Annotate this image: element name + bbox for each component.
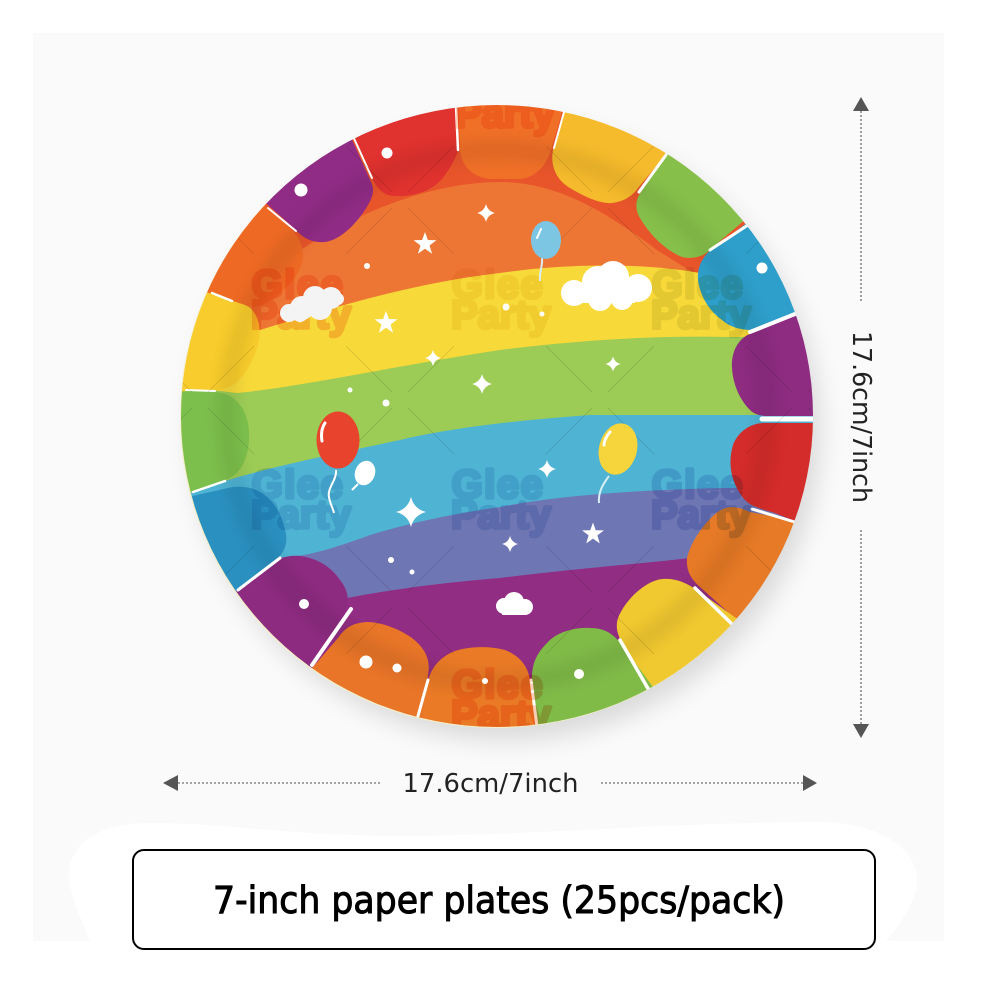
rim tab: green left [181,391,249,492]
watermark lower middle: Party [451,493,552,537]
plate shadow [192,122,820,740]
watermark lower right: Party [651,493,752,537]
cloud bottom [496,592,533,615]
cloud upper left [280,286,344,322]
band: yellow [215,266,750,393]
band: blue [190,415,813,558]
watermark lower left: Party [251,493,352,537]
watermark upper middle: Party [451,293,552,337]
balloon white small [351,458,379,490]
rim tab: purple lower left [236,556,348,620]
rim tab: blue [698,224,795,330]
horizontal dimension arrow [163,769,817,799]
balloon red [316,412,360,513]
rim tab: blue left [192,486,286,592]
rim tab: orange lower right [686,507,794,618]
watermark upper right: Party [651,293,752,337]
watermark upper left: Glee [252,263,344,307]
watermark lower left [251,463,352,537]
cloud upper middle [561,261,652,311]
rim tab: green [636,154,744,258]
rim tab: red top [355,108,458,196]
watermark lower right: Glee [652,463,744,507]
band: green [190,336,759,493]
rim tab: red right [730,423,813,520]
rim tab: yellow lower right [616,578,736,686]
watermark top: Party [455,92,556,136]
watermark bottom: Party [451,693,552,737]
watermark upper middle: Glee [452,263,544,307]
white bottom blob [69,822,917,941]
band: purple [311,558,730,679]
horizontal dimension label: 17.6cm/7inch [402,769,578,799]
watermark lower middle [451,463,552,537]
rim tab: purple right [732,316,813,416]
rim tab: orange lower left [312,622,429,717]
rim tab: green bottom [532,628,652,724]
crosshair watermark lines [181,146,813,654]
balloon yellow [593,419,643,503]
rim tab: orange upper left [207,206,303,307]
watermark bottom [452,667,552,727]
band: orange dome [248,182,691,330]
band: indigo [281,488,790,598]
plate cream rim [180,106,812,728]
rim tab: purple upper left [266,140,373,242]
watermark upper middle [451,263,552,337]
vertical dimension arrow [846,97,876,738]
watermark bottom: Glee [452,663,544,707]
sparkles and stars [294,148,768,684]
watermark upper left: Party [251,293,352,337]
rim tab: orange bottom [422,647,536,727]
plate base [264,107,746,273]
rim tab: yellow left [182,292,260,392]
rim seams [186,106,815,727]
rim tab: gold [552,112,666,204]
watermark lower left: Glee [252,463,344,507]
rainbow plate [181,105,813,727]
watermark upper right: Glee [652,263,744,307]
watermark lower right [651,463,752,537]
watermark upper right [651,263,752,337]
rim tab: orange top [458,105,562,179]
caption box [133,850,875,949]
vertical dimension label: 17.6cm/7inch [846,331,876,503]
watermark lower middle: Glee [452,463,544,507]
rim crease shading [227,150,767,682]
watermark upper left [251,263,352,337]
caption text: 7-inch paper plates (25pcs/pack) [213,879,785,922]
balloon blue [531,221,561,281]
